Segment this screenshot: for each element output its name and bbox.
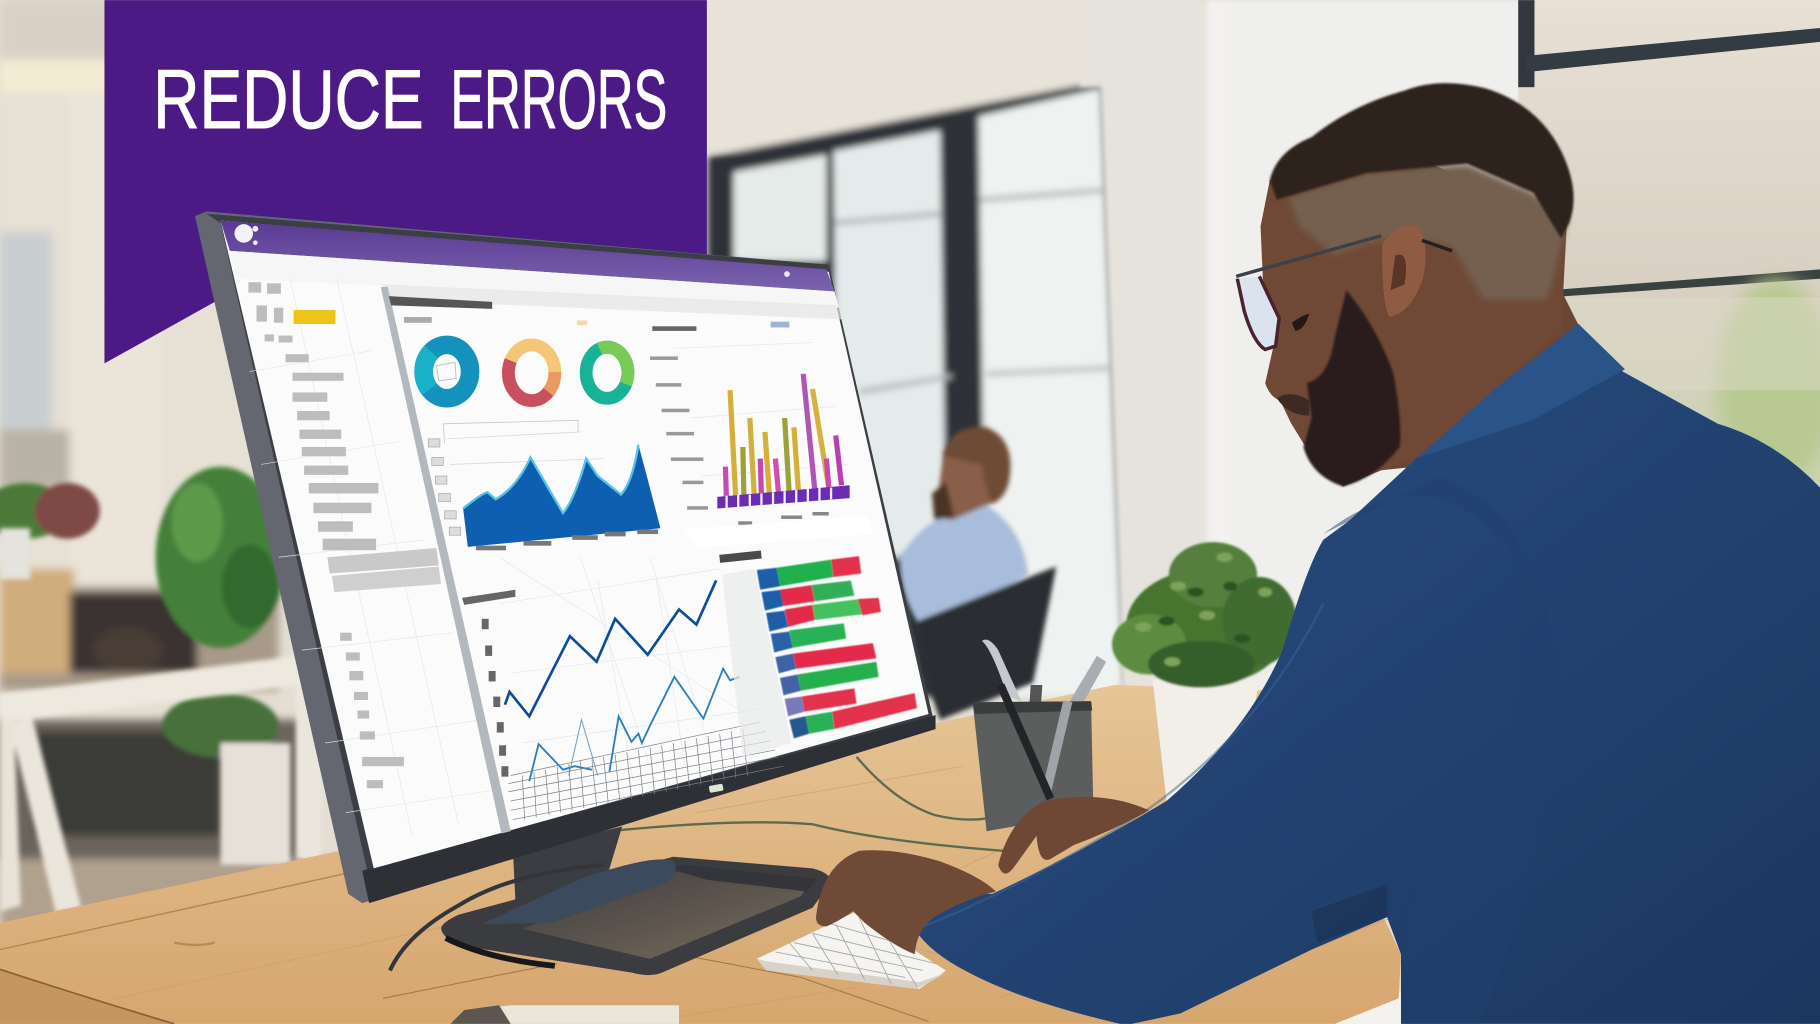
- potted plant: [1112, 542, 1297, 807]
- ear: [1382, 225, 1426, 317]
- fade side of hair: [1288, 164, 1567, 300]
- white column: [1079, 0, 1529, 708]
- keyboard: [757, 912, 946, 989]
- cables: [621, 757, 1004, 851]
- left side table: [0, 528, 322, 912]
- donut green: [586, 347, 628, 398]
- head: [1236, 83, 1574, 486]
- glasses: [1236, 236, 1452, 350]
- plant pot: [1153, 679, 1259, 807]
- sleeve shading: [1323, 476, 1557, 1024]
- left wall: [0, 0, 348, 929]
- title banner: [104, 0, 707, 363]
- neck: [1358, 244, 1584, 470]
- left hand on keyboard: [816, 850, 996, 954]
- collar: [1417, 324, 1625, 457]
- line charts: [462, 550, 783, 820]
- table side panel: [722, 569, 792, 757]
- foliage: [1112, 542, 1297, 687]
- monitor stand: [390, 827, 831, 975]
- bar chart: [650, 343, 850, 525]
- screen grid: [250, 279, 754, 836]
- paper on desk: [450, 1005, 679, 1024]
- person: [816, 83, 1820, 1024]
- background colleague: [900, 427, 1056, 720]
- nose and lips: [1277, 394, 1309, 416]
- data table: [508, 722, 783, 820]
- centre wall and window: [706, 0, 1126, 697]
- title: ERRORS: [450, 52, 667, 146]
- colleague shirt: [900, 505, 1028, 621]
- donut orange red: [508, 345, 555, 401]
- monitor brand mark: [709, 784, 724, 793]
- monitor: [195, 211, 936, 903]
- donut blue: [424, 345, 470, 398]
- colleague head: [934, 427, 1010, 520]
- area chart: [428, 420, 660, 550]
- shirt torso and arm: [915, 324, 1820, 1024]
- lower panel band: [685, 515, 873, 548]
- screen divider: [381, 287, 511, 834]
- office chair: [917, 567, 1056, 720]
- title: REDUCE: [153, 52, 424, 146]
- tab strip: [389, 296, 492, 309]
- right window: [1518, 0, 1820, 511]
- donut charts: [424, 345, 628, 401]
- left plants: [0, 467, 290, 865]
- wooden desk: [0, 685, 1404, 1024]
- screen: [221, 221, 929, 868]
- logo: [234, 224, 258, 245]
- pen holder: [973, 640, 1106, 831]
- eye: [1292, 314, 1309, 331]
- screen header bar: [221, 221, 835, 291]
- sidebar rows: [248, 282, 441, 788]
- monitor cable: [390, 865, 604, 970]
- top of hair: [1270, 83, 1574, 238]
- beard: [1303, 290, 1400, 486]
- monitor bezel: [195, 211, 936, 903]
- heat bars: [757, 556, 917, 738]
- face: [1261, 163, 1567, 486]
- right hand: [998, 797, 1149, 874]
